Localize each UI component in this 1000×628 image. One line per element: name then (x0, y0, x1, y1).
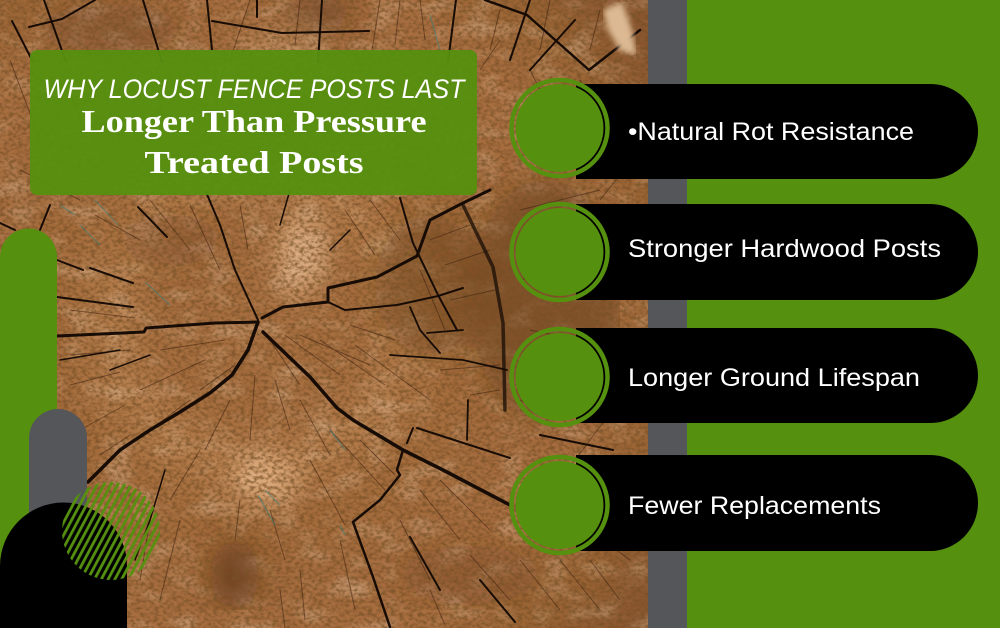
wood background (0, 0, 648, 628)
fine radial grain lines (10, 0, 640, 628)
green right panel (687, 0, 1000, 628)
item 1 (512, 80, 978, 179)
grey vertical strip (648, 0, 687, 628)
item 1: •Natural Rot Resistance (628, 118, 914, 146)
item 4 (512, 455, 978, 553)
black arch (0, 502, 127, 628)
item 3: Longer Ground Lifespan (628, 364, 920, 392)
title panel (30, 50, 477, 195)
hatched circle (62, 482, 160, 580)
title line 1: WHY LOCUST FENCE POSTS LAST (44, 74, 466, 104)
teal specks (60, 15, 440, 535)
grey bar (29, 409, 87, 628)
item 2: Stronger Hardwood Posts (628, 235, 941, 263)
cracks (0, 0, 640, 627)
left green bar (0, 228, 57, 628)
item 2 (512, 204, 978, 300)
title line 3: Treated Posts (144, 144, 364, 180)
bright patch (603, 2, 636, 55)
title line 2: Longer Than Pressure (82, 103, 426, 139)
item 3 (512, 328, 978, 425)
item 4: Fewer Replacements (628, 492, 881, 520)
